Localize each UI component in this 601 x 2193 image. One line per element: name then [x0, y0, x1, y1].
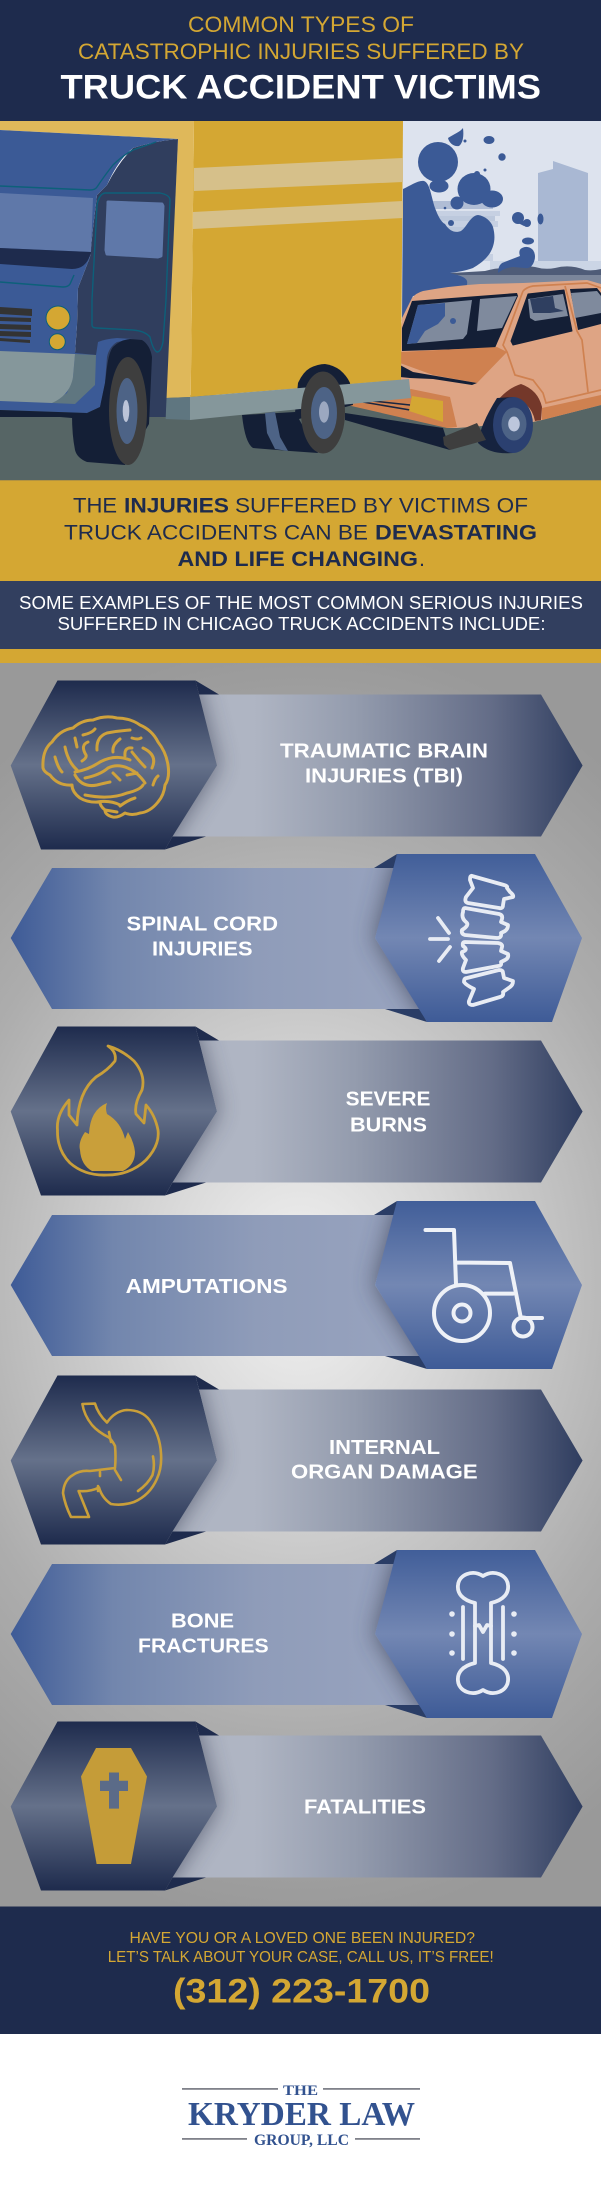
label: bone fractures: BONE	[171, 1610, 234, 1632]
statement line 2: DEVASTATING	[375, 520, 537, 544]
logo: group llc: GROUP, LLC	[254, 2132, 349, 2149]
car side windows	[511, 288, 601, 345]
cab side panel	[75, 139, 178, 417]
item: traumatic brain injuries	[11, 680, 583, 850]
grey injuries panel	[0, 663, 601, 1907]
cta line 1: HAVE YOU OR A LOVED ONE BEEN INJURED?	[130, 1930, 475, 1947]
call to action banner	[0, 1906, 601, 2034]
car hood	[400, 347, 507, 383]
statement line 3: AND LIFE CHANGING	[178, 547, 418, 571]
icon: fractured bone	[449, 1573, 517, 1693]
intro line 1: SOME EXAMPLES OF THE MOST COMMON SERIOUS INJURIES	[19, 593, 583, 613]
cab windows	[0, 193, 93, 252]
bumper	[52, 354, 96, 404]
label: severe burns: SEVERE	[346, 1088, 430, 1110]
background buildings	[433, 161, 601, 275]
statement line 1: SUFFERED BY VICTIMS OF	[235, 494, 528, 518]
statement line 2: TRUCK ACCIDENTS CAN BE	[64, 520, 368, 544]
underbody strip	[0, 410, 87, 418]
truck cab	[0, 130, 178, 418]
cab teal trim	[0, 142, 170, 352]
wheel arch	[498, 384, 542, 421]
label: bone fractures	[138, 1610, 269, 1658]
statement line 2	[64, 520, 537, 544]
label: spinal cord injuries: INJURIES	[152, 938, 252, 960]
intro line 2: SUFFERED IN CHICAGO TRUCK ACCIDENTS INCLUDE:	[58, 614, 546, 634]
label: traumatic brain injuries	[280, 740, 488, 788]
rear wheel face	[301, 372, 345, 454]
cta line 2: LET’S TALK ABOUT YOUR CASE, CALL US, IT’S FREE!	[108, 1949, 494, 1966]
label: fatalities: FATALITIES	[304, 1796, 426, 1818]
icon: brain	[43, 717, 169, 817]
icon: coffin	[81, 1748, 147, 1864]
title line 1: COMMON TYPES OF	[188, 12, 414, 37]
icon: stomach	[63, 1404, 161, 1517]
cab front	[0, 130, 178, 413]
item: internal organ damage	[11, 1376, 583, 1544]
truck front wheel	[72, 339, 152, 465]
car front wheel	[478, 397, 533, 453]
label: severe burns: BURNS	[350, 1114, 427, 1136]
label: spinal cord injuries	[126, 914, 278, 960]
smoke cloud	[402, 128, 544, 321]
phone number: (312) 223-1700	[173, 1972, 430, 2010]
car body	[400, 280, 601, 428]
door lines	[503, 283, 601, 403]
logo	[182, 2083, 420, 2149]
label: internal organ damage: INTERNAL	[329, 1437, 440, 1459]
item: severe burns	[11, 1026, 583, 1196]
statement band	[0, 480, 601, 581]
label: internal organ damage: ORGAN DAMAGE	[291, 1462, 478, 1484]
title banner	[0, 0, 601, 121]
car plate	[409, 396, 443, 422]
statement line 1: INJURIES	[124, 494, 229, 518]
label: amputations: AMPUTATIONS	[126, 1276, 288, 1298]
sky	[400, 121, 601, 321]
intro band	[0, 581, 601, 649]
statement line 1: THE	[73, 494, 117, 518]
car windshield	[402, 293, 518, 351]
label: bone fractures: FRACTURES	[138, 1636, 269, 1658]
item: bone fractures	[11, 1550, 582, 1718]
label: traumatic brain injuries: TRAUMATIC BRAIN	[280, 740, 488, 762]
ground	[0, 395, 601, 480]
orange car	[345, 280, 601, 453]
label: spinal cord injuries: SPINAL CORD	[126, 914, 278, 936]
truck box	[0, 121, 403, 398]
car underside	[345, 413, 450, 450]
hero illustration: truck crash	[0, 121, 601, 480]
logo: the: THE	[283, 2083, 318, 2099]
label: traumatic brain injuries: INJURIES (TBI)	[305, 766, 463, 788]
title line 3: TRUCK ACCIDENT VICTIMS	[60, 68, 541, 106]
headlights	[46, 306, 70, 330]
truck rear wheels	[242, 364, 353, 453]
item: amputations	[11, 1201, 582, 1369]
label: severe burns	[346, 1088, 430, 1136]
icon: spine	[430, 876, 513, 1005]
logo: kryder law: KRYDER LAW	[188, 2096, 415, 2133]
item: fatalities	[11, 1722, 583, 1890]
item: spinal cord injuries	[11, 854, 582, 1022]
icon: wheelchair	[426, 1230, 542, 1341]
statement line 1	[73, 494, 528, 518]
truck chassis bar	[166, 379, 411, 420]
gold divider	[0, 649, 601, 663]
label: internal organ damage	[291, 1437, 478, 1484]
skyline and road	[450, 266, 601, 300]
title line 2: CATASTROPHIC INJURIES SUFFERED BY	[78, 39, 524, 64]
grille	[0, 307, 32, 343]
statement line 3: .	[419, 547, 425, 571]
icon: flame	[57, 1046, 158, 1175]
